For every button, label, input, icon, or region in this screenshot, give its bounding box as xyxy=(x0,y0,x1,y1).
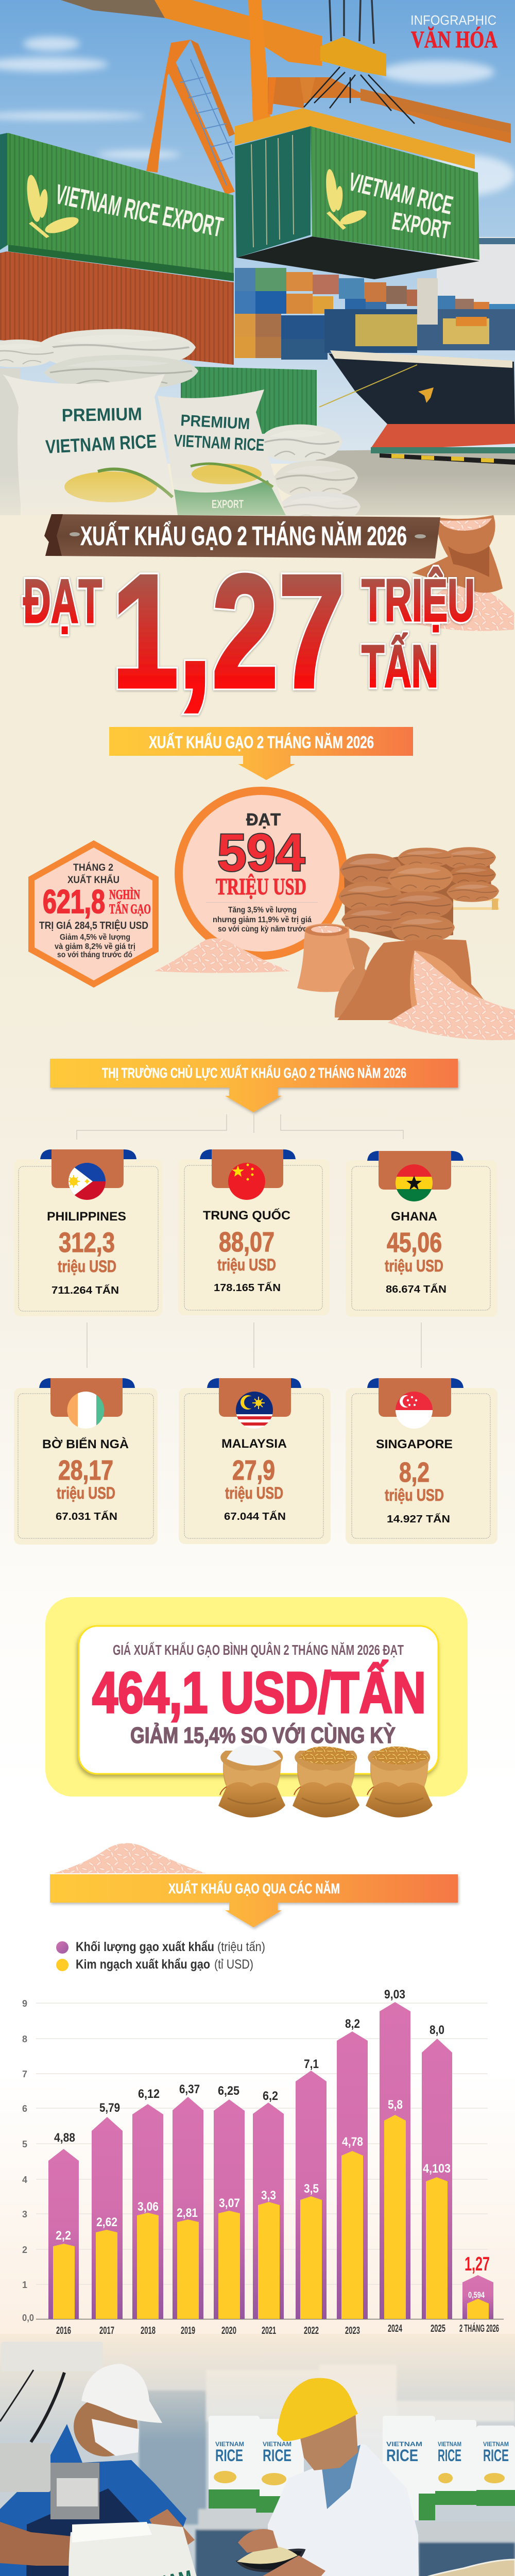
card: Bờ Biển Ngà: BỜ BIỂN NGÀ xyxy=(42,1437,129,1451)
card: Ghana: 86.674 TẤN xyxy=(386,1283,447,1295)
spreader xyxy=(235,37,475,169)
y axis labels xyxy=(22,1998,34,2323)
orange container xyxy=(0,251,234,365)
flag: Singapore xyxy=(396,1392,433,1429)
card: Philippines xyxy=(14,1149,162,1316)
volume bars xyxy=(48,2002,493,2319)
card: Bờ Biển Ngà: 28,17 xyxy=(58,1455,113,1486)
front rice sack 2: VIETNAM RICE xyxy=(174,431,265,454)
card: Malaysia xyxy=(179,1378,331,1544)
sewing machine xyxy=(0,2370,99,2519)
flag: Philippines xyxy=(67,1162,106,1201)
x axis labels: 2024 xyxy=(388,2323,403,2334)
spilled rice xyxy=(388,951,515,1040)
value labels: 5,8 xyxy=(388,2098,403,2112)
hexagon text: so với tháng trước đó xyxy=(57,951,132,959)
bar chart: rice exports by year xyxy=(22,1988,504,2336)
x axis labels: 2019 xyxy=(181,2325,195,2336)
value labels xyxy=(56,2098,485,2300)
card: Singapore: triệu USD xyxy=(385,1486,444,1504)
hexagon text: TẤN GẠO xyxy=(109,902,151,917)
value labels: 4,78 xyxy=(342,2135,363,2149)
chart legend: Khối lượng gạo xuất khẩu xyxy=(76,1940,214,1954)
pile shadow backing xyxy=(344,855,492,940)
left green container xyxy=(0,133,234,281)
x axis labels: 2016 xyxy=(56,2325,71,2336)
y axis labels: 2 xyxy=(22,2245,27,2255)
card: Philippines: PHILIPPINES xyxy=(47,1210,126,1224)
card: Singapore: SINGAPORE xyxy=(376,1437,453,1451)
card: Philippines: triệu USD xyxy=(58,1257,116,1276)
head xyxy=(74,2397,138,2456)
tied sack xyxy=(335,938,379,1018)
sack: golden rice xyxy=(366,1747,433,1818)
value labels: 3,06 xyxy=(138,2200,159,2214)
panel: average export price xyxy=(45,1597,468,1818)
card: Malaysia: 67.044 TẤN xyxy=(224,1511,286,1522)
x axis labels: 2017 xyxy=(99,2325,114,2336)
card: Trung Quốc: 88,07 xyxy=(219,1227,274,1258)
word: Đạt: ĐẠT xyxy=(23,567,102,636)
flag: Malaysia xyxy=(236,1392,273,1429)
front rice sack 2 xyxy=(158,389,286,515)
volume labels: 6,12 xyxy=(138,2087,160,2101)
sack: brown rice xyxy=(293,1747,359,1818)
volume labels: 8,0 xyxy=(430,2023,444,2037)
x axis labels: 2021 xyxy=(262,2325,276,2336)
face mask xyxy=(92,2419,139,2456)
product bags on shelf: RICE xyxy=(438,2446,461,2465)
card: Bờ Biển Ngà xyxy=(14,1378,158,1545)
nails xyxy=(70,532,426,538)
section header: thị trường chủ lực xyxy=(50,1059,458,1112)
circle: đạt 594 triệu USD: TRIỆU USD xyxy=(216,873,306,900)
card: Bờ Biển Ngà: triệu USD xyxy=(57,1484,115,1502)
hexagon text: NGHÌN xyxy=(109,887,140,902)
y axis labels: 6 xyxy=(22,2104,27,2114)
right inspector xyxy=(237,2378,419,2576)
rice pile above chart header xyxy=(54,1843,205,1873)
volume labels: 9,03 xyxy=(384,1988,405,2002)
open burlap sack (top right) xyxy=(412,515,503,593)
volume labels: 5,79 xyxy=(99,2101,120,2115)
x axis labels: 2025 xyxy=(431,2323,445,2334)
hexagon text: và giảm 8,2% về giá trị xyxy=(55,942,135,951)
product bags on shelf: VIETNAM xyxy=(263,2441,291,2448)
card: Bờ Biển Ngà: 67.031 TẤN xyxy=(56,1511,117,1522)
product bags on shelf: VIETNAM xyxy=(215,2441,244,2448)
pallet xyxy=(448,899,499,910)
front rice sack 1: VIETNAM RICE xyxy=(45,431,157,457)
circle: đạt 594 triệu USD: ĐẠT xyxy=(246,810,281,829)
small open sack xyxy=(297,923,354,992)
y axis labels: 1 xyxy=(22,2280,27,2290)
x axis labels: 2022 xyxy=(304,2325,319,2336)
white rice sacks stack xyxy=(0,329,360,524)
value labels: 3,5 xyxy=(304,2182,319,2196)
burlap sacks pile xyxy=(297,847,515,1040)
card: Trung Quốc: triệu USD xyxy=(217,1256,276,1274)
word: Đạt: ĐẠT xyxy=(23,567,102,636)
front rice sack 1: PREMIUM xyxy=(61,404,142,426)
section header: xuất khẩu gạo 2 tháng: XUẤT KHẨU GẠO 2 THÁNG NĂM 2026 xyxy=(149,733,374,752)
hero photo: rice containers at port xyxy=(0,0,515,524)
section header: xuất khẩu gạo qua các năm: XUẤT KHẨU GẠO QUA CÁC NĂM xyxy=(168,1880,340,1896)
word: Đạt xyxy=(23,567,102,636)
volume labels xyxy=(54,1988,490,2275)
card: Trung Quốc: 178.165 TẤN xyxy=(214,1282,281,1294)
product bags on shelf: RICE xyxy=(386,2446,418,2465)
product bags on shelf: VIETNAM xyxy=(438,2441,461,2448)
cap xyxy=(81,2364,162,2423)
x axis labels: 2023 xyxy=(345,2325,360,2336)
rice pile under circle xyxy=(154,938,290,973)
circle: đạt 594 triệu USD: Tăng 3,5% về lượng xyxy=(228,906,297,914)
hexagon text xyxy=(39,862,151,959)
background container stack xyxy=(235,237,515,360)
card: Malaysia: MALAYSIA xyxy=(221,1437,287,1451)
wheat icon xyxy=(25,174,80,238)
y axis labels: 5 xyxy=(22,2139,27,2149)
card: Trung Quốc xyxy=(178,1149,330,1315)
product bags on shelf: RICE xyxy=(263,2446,291,2465)
quay ground xyxy=(309,448,515,515)
volume labels: 8,2 xyxy=(345,2017,360,2031)
chart legend: (triệu tấn) xyxy=(217,1940,265,1954)
y axis labels: 3 xyxy=(22,2209,27,2219)
x axis labels xyxy=(56,2323,499,2336)
logo: Infographic Văn Hóa (top): INFOGRAPHIC xyxy=(410,12,496,28)
value labels: 2,62 xyxy=(96,2215,117,2229)
number: 1,27: 1,27 xyxy=(112,542,345,721)
hexagon text: THÁNG 2 xyxy=(73,862,113,873)
circle: đạt 594 triệu USD: so với cùng kỳ năm trước xyxy=(218,925,307,934)
x axis labels: 2018 xyxy=(141,2325,156,2336)
card: Singapore xyxy=(346,1378,497,1544)
product bags on shelf: VIETNAM xyxy=(386,2441,422,2448)
volume labels: 6,25 xyxy=(218,2084,239,2098)
volume labels: 6,37 xyxy=(179,2082,200,2096)
number: 1,27: 1,27 xyxy=(112,542,345,721)
card: Ghana: 45,06 xyxy=(387,1227,442,1258)
panel: average export price: 464,1 USD/TẤN xyxy=(92,1660,426,1725)
panel: average export price: GIÁ XUẤT KHẨU GẠO BÌNH QUÂN 2 THÁNG NĂM 2026 ĐẠT xyxy=(113,1642,404,1658)
card: Philippines: 312,3 xyxy=(59,1227,115,1258)
fade from page into photo xyxy=(0,2334,515,2442)
volume labels: 1,27 xyxy=(465,2253,490,2275)
word: Tấn xyxy=(362,632,438,700)
product bags on shelf: RICE xyxy=(215,2446,243,2465)
crane xyxy=(61,0,511,195)
word: Tấn: TẤN xyxy=(362,632,438,700)
connector lines xyxy=(77,1114,421,1368)
card: Singapore: 14.927 TẤN xyxy=(387,1513,450,1525)
front rice sack 1 xyxy=(3,374,178,515)
card: Ghana: triệu USD xyxy=(385,1257,443,1275)
bowl of rice xyxy=(237,2529,325,2576)
headline: Đạt 1,27 triệu tấn xyxy=(23,542,475,721)
y axis labels: 0,0 xyxy=(22,2313,34,2323)
value labels: 3,07 xyxy=(219,2196,240,2210)
x axis labels: 2020 xyxy=(221,2325,236,2336)
front rice sack 2: PREMIUM xyxy=(180,411,250,433)
card: Ghana xyxy=(346,1151,497,1317)
front rice sack 2: EXPORT xyxy=(212,498,244,511)
product bags on shelf: VIETNAM xyxy=(483,2441,509,2448)
product bags on shelf xyxy=(209,2416,515,2520)
logo: Infographic Văn Hóa (top) xyxy=(410,12,497,53)
hexagon: tháng 2 xyxy=(28,840,159,988)
value labels: 3,3 xyxy=(261,2189,276,2202)
hexagon text: TRỊ GIÁ 284,5 TRIỆU USD xyxy=(39,919,148,931)
y axis labels: 4 xyxy=(22,2175,27,2185)
card: Philippines: 711.264 TẤN xyxy=(52,1284,119,1296)
flag: Ghana xyxy=(396,1164,433,1201)
sack: white rice xyxy=(218,1745,285,1818)
factory background xyxy=(139,2365,515,2576)
word: Tấn: TẤN xyxy=(362,632,438,700)
panel: average export price: GIẢM 15,4% SO VỚI CÙNG KỲ xyxy=(130,1722,396,1748)
wooden title banner xyxy=(44,514,440,558)
card: Malaysia: triệu USD xyxy=(225,1484,283,1502)
bottom photo: rice factory workers xyxy=(0,2334,515,2576)
section header: xuất khẩu gạo 2 tháng xyxy=(109,727,413,780)
hanging container: EXPORT xyxy=(390,208,452,244)
wheat icon xyxy=(324,168,368,230)
rice sack: Vietnam Rice xyxy=(68,2522,217,2576)
flag: China xyxy=(228,1163,265,1200)
circle: đạt 594 triệu USD: 594 xyxy=(217,823,305,882)
hexagon text: XUẤT KHẨU xyxy=(67,874,119,886)
green back container xyxy=(181,366,317,434)
circle: đạt 594 triệu USD: nhưng giảm 11,9% về trị giá xyxy=(213,916,312,924)
hanging container xyxy=(235,126,479,279)
value labels: 2,2 xyxy=(56,2229,71,2243)
hexagon text: 621,8 xyxy=(43,883,105,920)
value labels: 0,594 xyxy=(468,2290,485,2300)
hexagon text: Giảm 4,5% về lượng xyxy=(60,933,130,942)
hard hat xyxy=(277,2378,358,2441)
stacked rice bags xyxy=(294,2560,515,2576)
big open sack xyxy=(337,939,490,1020)
flag: Côte d'Ivoire xyxy=(67,1392,107,1429)
chart legend xyxy=(56,1940,265,1972)
chart legend: Kim ngạch xuất khẩu gạo xyxy=(76,1957,210,1972)
volume labels: 7,1 xyxy=(304,2057,319,2071)
left worker xyxy=(0,2364,195,2576)
y axis labels: 7 xyxy=(22,2069,27,2079)
card: Trung Quốc: TRUNG QUỐC xyxy=(203,1208,290,1223)
circle: đạt 594 triệu USD xyxy=(175,787,348,960)
fade from hero photo into page xyxy=(0,474,515,563)
volume labels: 4,88 xyxy=(54,2131,75,2145)
container lettering: VIETNAM RICE EXPORT xyxy=(53,179,226,243)
volume labels: 6,2 xyxy=(263,2089,278,2103)
machine top panel xyxy=(1,2342,103,2371)
section header: xuất khẩu gạo qua các năm xyxy=(50,1874,458,1927)
card: Ghana: GHANA xyxy=(391,1210,437,1224)
value labels: 4,103 xyxy=(423,2162,451,2176)
value labels: 2,81 xyxy=(177,2206,198,2220)
value bars xyxy=(53,2115,489,2319)
face xyxy=(297,2411,358,2470)
chart legend: (tỉ USD) xyxy=(214,1957,253,1972)
y axis labels: 9 xyxy=(22,1998,27,2009)
y axis labels: 8 xyxy=(22,2034,27,2044)
ship xyxy=(319,350,515,449)
rice pile behind headline xyxy=(404,577,514,631)
card: Singapore: 8,2 xyxy=(399,1457,430,1488)
card: Malaysia: 27,9 xyxy=(232,1455,275,1486)
